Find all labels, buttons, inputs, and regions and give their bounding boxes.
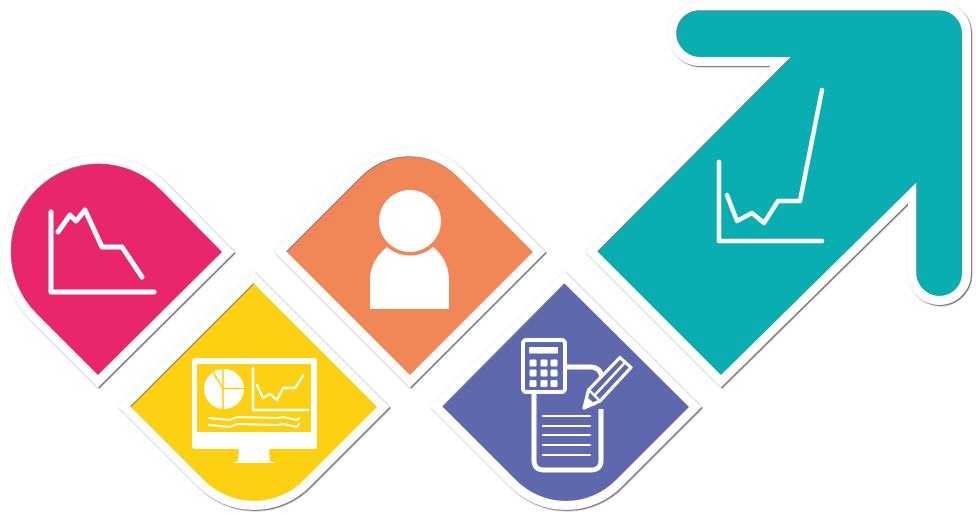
- pencil: [583, 358, 631, 409]
- icon: rising line chart: [719, 90, 822, 241]
- document: [534, 367, 602, 470]
- panel: orange person: [286, 156, 533, 375]
- pie chart: [204, 368, 245, 410]
- calculator: [523, 340, 565, 392]
- small line chart: [253, 368, 308, 410]
- icon: computer monitor with charts: [192, 358, 317, 463]
- panel: purple calculation: [442, 283, 689, 501]
- panel: pink declining chart: [11, 164, 222, 375]
- wavy text lines: [209, 417, 299, 427]
- panel: teal rising arrow: [597, 10, 962, 375]
- icon: person: [370, 190, 449, 309]
- panel: yellow monitor: [130, 283, 377, 501]
- icon: falling line chart: [51, 210, 154, 292]
- icon: calculator, document and pencil: [523, 340, 631, 470]
